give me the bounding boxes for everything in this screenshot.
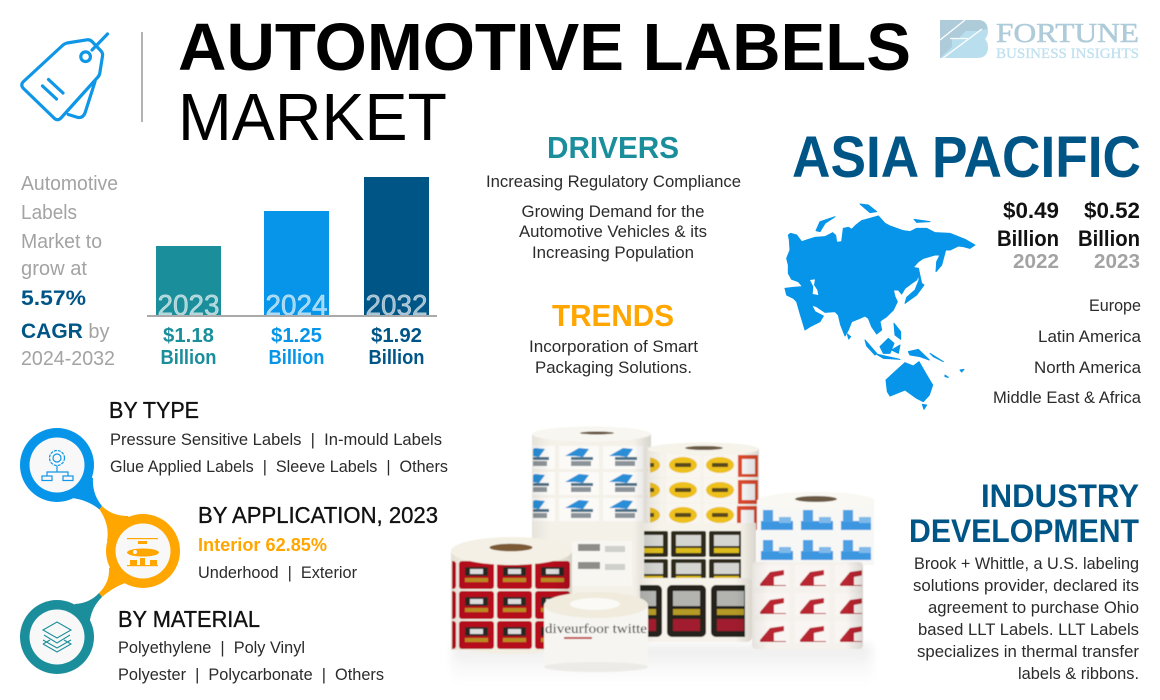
logo: Fortune Business Insights: BUSINESS INSIGHTS [996,46,1139,62]
divider [141,32,143,122]
bar 2024: $1.25 [271,325,322,347]
industry development: labels & ribbons. [1018,664,1139,683]
trends [529,298,698,377]
bar 2023 [156,246,221,369]
title: AUTOMOTIVE LABELS [178,10,911,85]
floor reflection [452,645,872,695]
by material: BY MATERIAL [118,606,260,632]
region values [997,198,1140,273]
by type: Glue Applied Labels | Sleeve Labels | Others [110,457,448,476]
drivers [486,130,741,262]
drivers: Growing Demand for the [522,202,704,221]
bar 2032 [364,177,429,369]
value 2023 [1078,198,1140,273]
growth text [21,173,118,370]
drivers: Increasing Population [532,243,694,262]
by material [118,606,384,684]
bar 2032: 2032 [366,290,428,322]
value 2023: $0.52 [1084,198,1140,223]
by application: Interior 62.85% [198,535,327,555]
trends: TRENDS [552,298,674,333]
by application: BY APPLICATION, 2023 [198,502,438,528]
bar 2023: 2023 [158,290,220,322]
other regions list: Latin America [1038,327,1142,346]
roll: yellow labels [648,442,759,530]
other regions list: North America [1034,358,1142,377]
growth text: CAGR by [21,320,110,343]
title: MARKET [178,80,447,155]
growth text: Labels [21,202,77,224]
value 2023: 2023 [1094,251,1140,273]
node: material [20,600,94,674]
value 2022: $0.49 [1003,198,1059,223]
connector necks [57,465,143,637]
other regions list: Middle East & Africa [993,388,1142,407]
logo: Fortune Business Insights [940,18,1139,62]
industry development: solutions provider, declared its [913,576,1139,595]
industry development: based LLT Labels. LLT Labels [918,620,1139,639]
by application [198,502,438,582]
industry development [909,478,1139,683]
drivers: Increasing Regulatory Compliance [486,172,741,191]
logo: Fortune Business Insights: FORTUNE [996,18,1139,48]
by material: Polyethylene | Poly Vinyl [118,638,305,657]
photo: label rolls [451,426,874,695]
roll: front white tape [544,592,648,672]
drivers: DRIVERS [547,130,679,165]
value 2022: Billion [997,226,1059,251]
icon: price tags [22,34,108,120]
roll: black yellow labels [642,523,756,585]
by material: Polyester | Polycarbonate | Others [118,665,384,684]
industry development: specializes in thermal transfer [917,642,1139,661]
industry development: Brook + Whittle, a U.S. labeling [914,554,1139,573]
other regions list: Europe [1089,296,1141,315]
growth text: grow at [21,258,87,280]
roll: dark labels [638,578,752,642]
roll: front red labels [451,537,572,654]
bar 2024: Billion [268,347,324,369]
other regions list [993,296,1142,407]
by type: Pressure Sensitive Labels | In-mould Labels [110,430,442,449]
bar 2023: Billion [160,347,216,369]
trends: Incorporation of Smart [529,337,698,356]
bar chart [147,177,437,369]
growth text: 5.57% [21,287,86,310]
segment connector nodes [20,428,180,674]
by type: BY TYPE [109,397,199,423]
trends: Packaging Solutions. [535,358,692,377]
bar 2024 [264,211,329,369]
growth text: Automotive [21,173,118,195]
industry development: DEVELOPMENT [909,513,1139,549]
bar 2023: $1.18 [163,325,214,347]
industry development: agreement to purchase Ohio [928,598,1139,617]
by type [109,397,448,476]
title [178,10,911,155]
node: application [106,514,180,588]
value 2022 [997,198,1059,273]
bar 2032: Billion [368,347,424,369]
industry development: INDUSTRY [981,478,1139,514]
bar 2024: 2024 [266,290,328,322]
growth text: Market to [21,231,102,253]
by application: Underhood | Exterior [198,563,357,582]
bar 2032: $1.92 [371,325,422,347]
node: type [20,428,94,502]
growth text: 2024-2032 [21,348,115,370]
value 2022: 2022 [1013,251,1059,273]
roll: back tall blue [532,426,651,604]
map: Asia Pacific [785,204,975,409]
roll: right stacked blue and red [752,492,874,649]
roll: front white tape: diveurfoor twitte [545,622,647,637]
value 2023: Billion [1078,226,1140,251]
drivers: Automotive Vehicles & its [519,222,707,241]
